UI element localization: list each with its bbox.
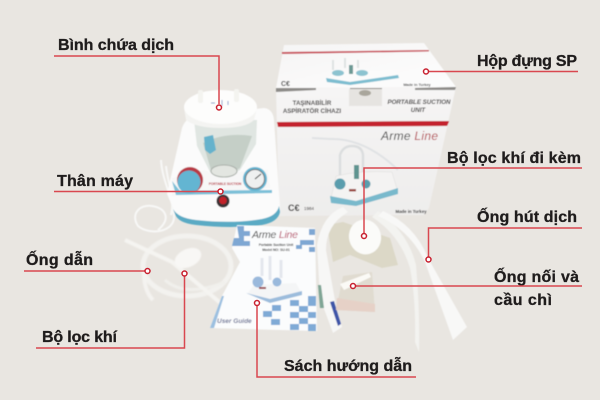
box red band	[277, 121, 449, 127]
label: Bộ lọc khí	[42, 329, 118, 346]
control panel	[172, 170, 270, 196]
connector bag	[336, 272, 375, 312]
callout: Thân máy	[54, 173, 223, 194]
label line 2: cầu chì	[494, 292, 552, 309]
booklet machine image	[246, 256, 302, 303]
marker	[254, 300, 260, 306]
label: Sách hướng dẫn	[284, 356, 412, 375]
photo: product box: C€	[288, 203, 300, 213]
photo: user guide booklet	[210, 225, 317, 331]
panel label: PORTABLE SUCTION	[209, 182, 242, 186]
centre tube	[372, 211, 419, 352]
callout: Bộ lọc khí đi kèm	[362, 150, 582, 238]
callout: Ống hút dịch	[426, 206, 582, 262]
photo: user guide booklet: User Guide	[217, 318, 252, 325]
power cable	[135, 160, 174, 231]
label: Bộ lọc khí đi kèm	[447, 150, 581, 167]
leader	[428, 228, 582, 257]
photo: tubing and air filter	[125, 236, 231, 306]
callout: Ống nối và cầu chì	[350, 266, 582, 309]
jar float	[204, 135, 216, 154]
box text: TAŞINABİLİR	[293, 100, 332, 107]
callout: Ống dẫn	[24, 249, 150, 274]
box top face	[276, 43, 456, 88]
leader	[257, 306, 416, 377]
booklet text: Arme Line	[251, 229, 298, 241]
label line 1: Ống nối và	[494, 266, 579, 286]
label: Bình chứa dịch	[58, 37, 174, 54]
photo: user guide booklet: Portable Suction Unit	[259, 243, 294, 247]
marker	[182, 271, 187, 276]
label: Ống dẫn	[26, 249, 93, 269]
filter disc	[345, 216, 385, 258]
box tab	[349, 89, 382, 106]
marker	[218, 189, 223, 194]
marker	[145, 268, 150, 274]
label: Hộp đựng SP	[477, 53, 577, 70]
marker	[424, 69, 428, 74]
machine base blue trim	[173, 206, 280, 227]
callout: Hộp đựng SP	[424, 53, 578, 74]
leader	[429, 70, 578, 72]
marker	[362, 234, 366, 238]
callout: Bộ lọc khí	[36, 271, 187, 348]
photo: product box: 1984	[304, 206, 315, 211]
callout: Bình chứa dịch	[54, 37, 222, 110]
callout: Sách hướng dẫn	[254, 300, 416, 377]
gauge	[243, 167, 267, 191]
marker	[426, 257, 431, 262]
leader	[356, 285, 582, 287]
photo: product box: Made in Turkey	[403, 83, 432, 87]
box top small machine image	[326, 58, 399, 85]
booklet checks top	[232, 226, 315, 252]
machine base	[167, 108, 280, 224]
plastic bag	[327, 222, 398, 268]
photo: product box	[276, 43, 456, 216]
label: Ống hút dịch	[477, 206, 577, 226]
marker	[350, 284, 356, 288]
booklet checks bottom	[263, 296, 316, 331]
left tube	[317, 207, 348, 333]
leader	[54, 190, 218, 192]
leader	[24, 270, 145, 272]
box top dark flap shadows	[276, 87, 456, 92]
collection catheter strip	[378, 211, 467, 340]
photo: product box: C€	[281, 81, 290, 88]
jar lid	[184, 108, 257, 128]
box front face	[276, 87, 456, 216]
photo: accessories and collection tubes	[317, 207, 467, 352]
photo: product box: ASPİRATÖR CİHAZI	[283, 108, 341, 115]
photo: product box: PORTABLE SUCTION	[387, 99, 451, 106]
box front machine image	[312, 138, 398, 206]
photo: suction machine	[135, 89, 280, 231]
photo: product box: UNIT	[411, 107, 426, 114]
label: Thân máy	[57, 173, 133, 190]
knob	[177, 167, 203, 193]
connector	[340, 273, 371, 290]
leader	[54, 56, 219, 104]
photo: user guide booklet: Model NO: SU-01	[262, 248, 290, 252]
power switch	[216, 194, 230, 208]
leader	[36, 276, 184, 348]
photo: product box: Made in Turkey	[396, 209, 427, 214]
jar	[194, 120, 257, 176]
leader	[364, 168, 582, 233]
photo: product box: Arme Line	[380, 129, 438, 143]
marker	[216, 105, 222, 110]
box top red stripe	[282, 50, 429, 54]
